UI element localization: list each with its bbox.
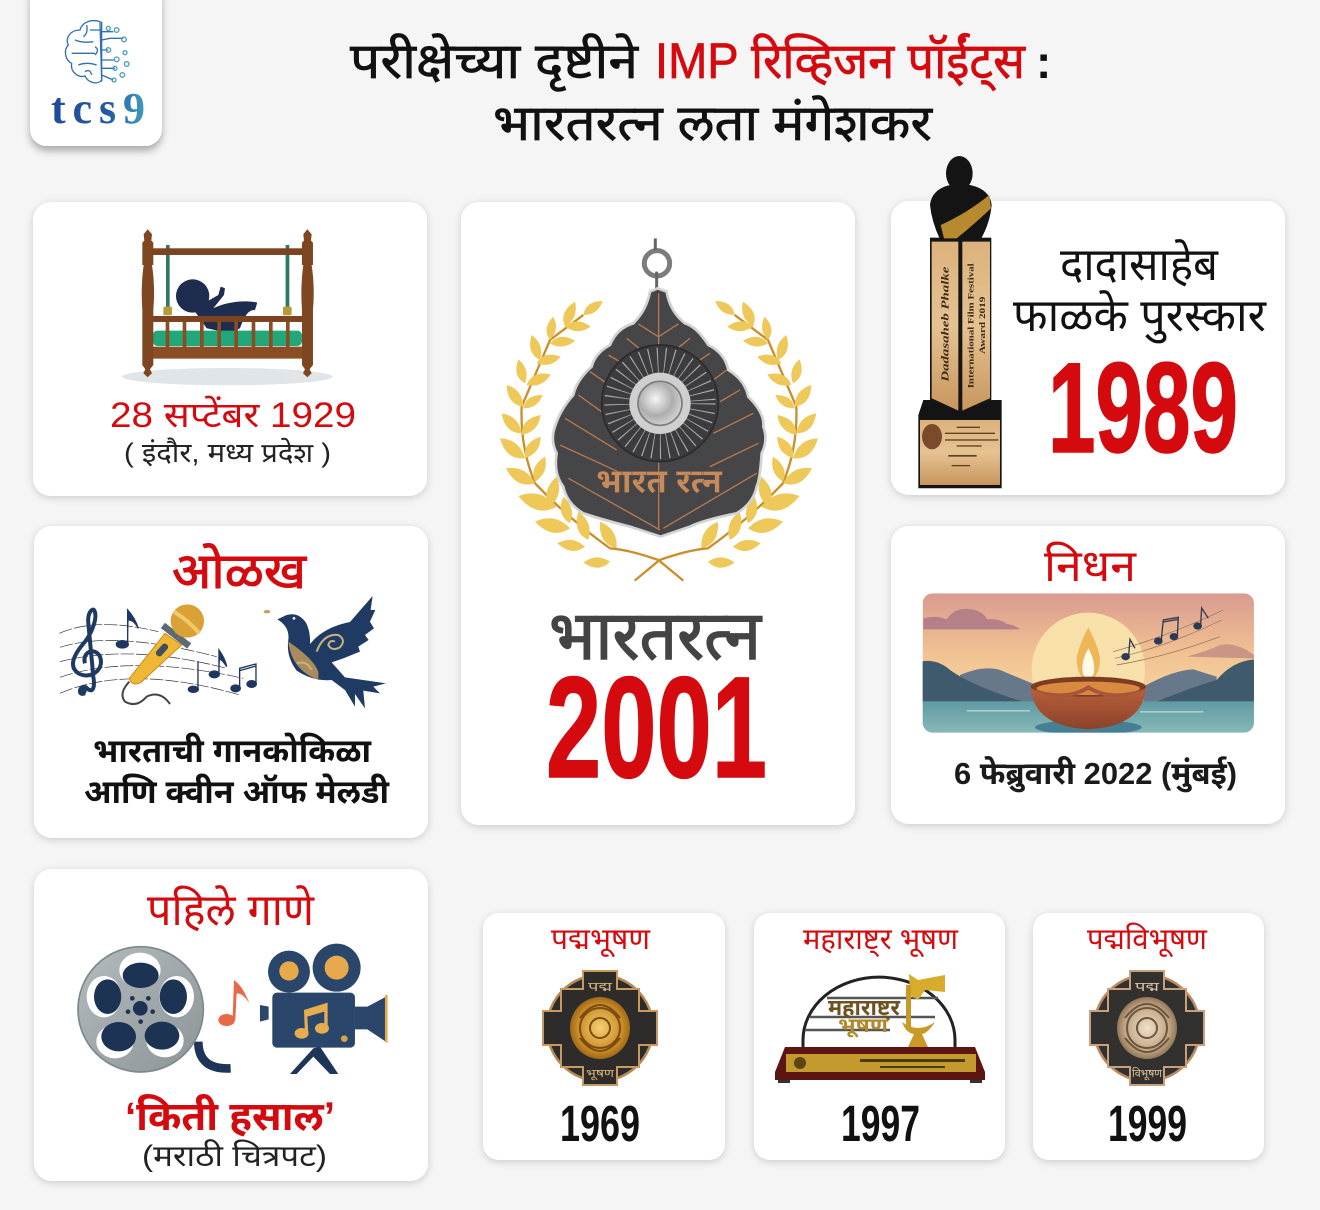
icon: Padma Vibhushan medal: विभूषण bbox=[1132, 1067, 1163, 1081]
medal ring bbox=[644, 238, 670, 288]
title: परीक्षेच्या दृष्टीने bbox=[350, 33, 639, 92]
death date: 6 फेब्रुवारी 2022 (मुंबई) bbox=[954, 756, 1237, 793]
panel: Padma Bhushan bbox=[483, 913, 725, 1160]
icon: Maharashtra Bhushan trophy: भूषण bbox=[838, 1015, 889, 1038]
icon: Padma Bhushan medal bbox=[543, 971, 657, 1085]
icon: music and microphone bbox=[59, 596, 386, 708]
icon: cradle with baby bbox=[122, 229, 333, 385]
heading: death: निधन bbox=[1044, 541, 1138, 591]
award name: दादासाहेब bbox=[1060, 237, 1219, 290]
wreath bbox=[496, 297, 822, 581]
icon: Maharashtra Bhushan trophy: महाराष्ट्र bbox=[828, 995, 901, 1021]
birth place: ( इंदौर, मध्य प्रदेश ) bbox=[124, 437, 331, 468]
heading: Padma Vibhushan: पद्मविभूषण bbox=[1087, 922, 1208, 958]
panel: identity: आणि क्वीन ऑफ मेलडी bbox=[84, 772, 390, 810]
heading: first song: पहिले गाणे bbox=[147, 884, 315, 935]
year 1997: 1997 bbox=[841, 1095, 920, 1152]
icon: Phalke trophy bbox=[918, 156, 1002, 488]
panel: identity bbox=[34, 526, 428, 838]
panel: birth bbox=[33, 202, 427, 496]
title: भारतरत्न लता मंगेशकर bbox=[493, 95, 934, 151]
picture: lamp at sunset bbox=[920, 593, 1257, 735]
medal veins bbox=[560, 293, 758, 530]
year 2001: 2001 bbox=[546, 647, 767, 808]
year 1999: 1999 bbox=[1108, 1095, 1187, 1152]
icon: Maharashtra Bhushan trophy bbox=[775, 974, 985, 1083]
heading: identity: ओळख bbox=[172, 543, 307, 599]
song name: ‘किती हसाल’ bbox=[125, 1094, 335, 1139]
title: IMP रिव्हिजन पॉईंट्स bbox=[655, 33, 1026, 92]
title: : bbox=[1036, 36, 1051, 88]
medal inscription: भारत रत्न bbox=[596, 464, 722, 501]
icon: Padma Bhushan medal: भूषण bbox=[586, 1068, 615, 1081]
panel: Padma Vibhushan bbox=[1033, 913, 1264, 1160]
medal leaf bbox=[553, 288, 765, 537]
heading: Maharashtra Bhushan: महाराष्ट्र भूषण bbox=[803, 923, 959, 958]
logo wordmark: tcs9 bbox=[51, 84, 145, 133]
Bharat Ratna label: भारतरत्न bbox=[549, 598, 762, 674]
logo: tcs9 bbox=[30, 0, 162, 146]
birth date: 28 सप्टेंबर 1929 bbox=[110, 395, 356, 435]
icon: Padma Bhushan medal: पद्म bbox=[588, 979, 613, 994]
identity text: भारताची गानकोकिळा bbox=[93, 732, 372, 769]
icon: Phalke trophy: Award 2019 bbox=[978, 297, 987, 354]
panel: Maharashtra Bhushan bbox=[754, 913, 1005, 1160]
panel: death bbox=[891, 526, 1285, 824]
icon: Phalke trophy: International Film Festival bbox=[966, 262, 975, 388]
film type: (मराठी चित्रपट) bbox=[142, 1139, 327, 1173]
year 1969: 1969 bbox=[560, 1095, 640, 1152]
panel: Dadasaheb Phalke award bbox=[891, 156, 1285, 495]
icon: Padma Vibhushan medal bbox=[1090, 971, 1204, 1085]
panel: Bharat Ratna bbox=[461, 202, 855, 825]
icon: Padma Vibhushan medal: पद्म bbox=[1135, 979, 1160, 994]
medal sun disc bbox=[602, 345, 718, 462]
icon: bird bbox=[277, 596, 386, 708]
title bbox=[350, 33, 1051, 151]
heading: Padma Bhushan: पद्मभूषण bbox=[551, 923, 651, 958]
icon: Phalke trophy: Dadasaheb Phalke bbox=[940, 266, 951, 383]
panel: Dadasaheb Phalke award: फाळके पुरस्कार bbox=[1013, 288, 1267, 345]
icon: circuit brain bbox=[65, 21, 129, 83]
icon: film reel, note and camera bbox=[78, 944, 388, 1074]
panel: first song bbox=[34, 869, 428, 1181]
icon: Bharat Ratna medal with wreath bbox=[496, 238, 822, 581]
